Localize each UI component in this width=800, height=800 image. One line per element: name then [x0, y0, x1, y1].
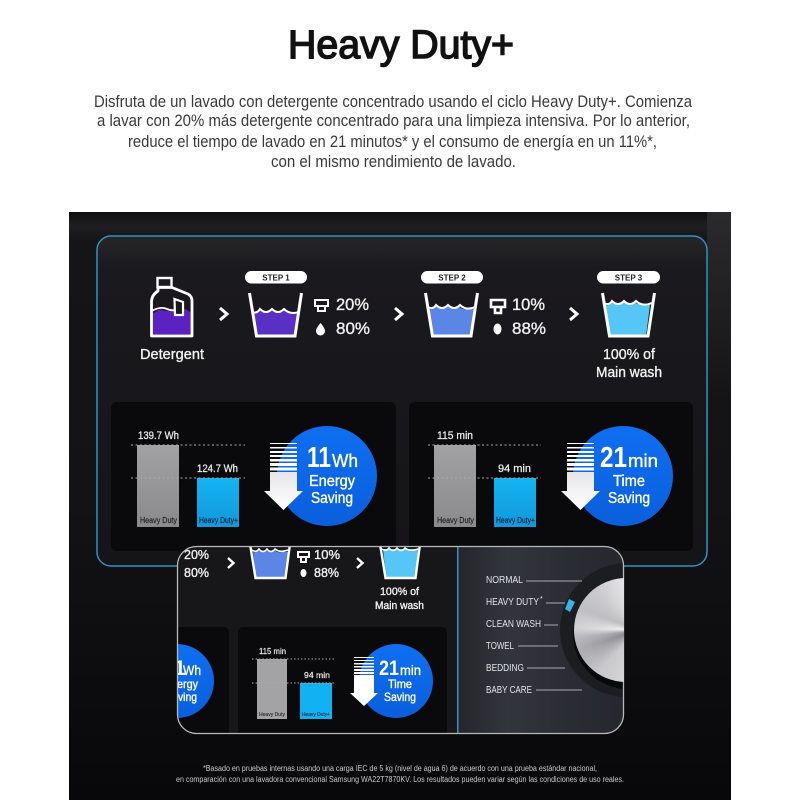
panel: energy saving: [111, 402, 396, 551]
step 2: 88%: [512, 319, 546, 338]
cycle menu labels: CLEAN WASH: [486, 619, 541, 630]
lens time card: Heavy Duty+: [302, 712, 330, 718]
panel: time saving: 21: [600, 442, 627, 474]
cycle menu labels: HEAVY DUTY: [486, 597, 539, 608]
footnote: en comparación con una lavadora convencional Samsung WA22T7870KV. Los resultados pueden variar según las condiciones de uso reales.: [176, 775, 624, 784]
lens step 1 values: 80%: [184, 565, 209, 580]
intro paragraph: reduce el tiempo de lavado en 21 minutos* y el consumo de energía en un 11%*,: [128, 133, 657, 151]
lens time card: Saving: [384, 690, 416, 704]
arrow: [570, 308, 577, 320]
footnote: *Basado en pruebas internas usando una carga IEC de 5 kg (nivel de agua 6) de acuerdo con una prueba estándar nacional,: [203, 764, 597, 773]
intro paragraph: con el mismo rendimiento de lavado.: [271, 153, 516, 171]
lens time card: 94 min: [304, 670, 330, 680]
detergent label: Detergent: [140, 346, 205, 363]
step 1: [245, 271, 370, 338]
panel: energy saving: 11: [307, 442, 331, 474]
panel: time saving: Time: [613, 473, 645, 490]
cycle menu labels: TOWEL: [486, 641, 514, 652]
lens step 2: [250, 544, 340, 580]
lens step 3: Main wash: [375, 600, 424, 612]
panel: energy saving: 139.7 Wh: [138, 430, 179, 442]
intro paragraph: a lavar con 20% más detergente concentrado para una limpieza intensiva. Por lo anterior,: [97, 112, 690, 130]
panel: energy saving: Saving: [311, 490, 353, 507]
lens step 2: 88%: [314, 565, 339, 580]
lens energy card: 1: [174, 657, 186, 680]
lens time card: 21: [379, 657, 399, 680]
cycle menu labels: BABY CARE: [486, 685, 532, 696]
lens outline: [178, 546, 624, 734]
step 3: [596, 271, 662, 381]
lens dial panel: [458, 546, 624, 734]
lens time card: min: [400, 662, 421, 678]
step 3: Main wash: [596, 364, 662, 381]
step 2: 10%: [512, 295, 545, 314]
lens arrow: [357, 558, 362, 568]
intro paragraph: Disfruta de un lavado con detergente concentrado usando el ciclo Heavy Duty+. Comienza: [94, 93, 693, 111]
step 3: STEP 3: [615, 274, 643, 282]
lens step 3: 100% of: [380, 586, 420, 598]
panel: magnified lens: [178, 547, 623, 733]
step 2: STEP 2: [438, 274, 466, 282]
panel: energy saving: Wh: [332, 451, 358, 471]
lens time card: [238, 627, 447, 737]
lens step 2: 10%: [314, 547, 340, 562]
panel: time saving: Heavy Duty+: [496, 516, 535, 525]
panel: time saving: 94 min: [498, 463, 531, 475]
cycle menu labels: [486, 575, 582, 696]
lens step 1 values: [184, 550, 209, 578]
step 1: STEP 1: [262, 274, 290, 282]
icon: silver dial knob: [574, 578, 624, 682]
intro paragraph: [94, 93, 693, 171]
lens energy card: ving: [178, 690, 197, 704]
step 1: 80%: [336, 319, 370, 338]
panel: time saving: [409, 402, 693, 551]
lens time card: 115 min: [259, 646, 286, 656]
panel: energy saving: Heavy Duty+: [199, 516, 238, 525]
panel: energy saving: Heavy Duty: [140, 516, 177, 525]
panel: energy saving: Energy: [309, 473, 355, 490]
panel: time saving: min: [628, 451, 658, 471]
panel: dark washer background: [69, 212, 731, 800]
panel: time saving: Saving: [608, 490, 650, 507]
lens energy card: Wh: [183, 662, 201, 678]
lens time card: Time: [388, 677, 412, 691]
lens divider: [457, 546, 458, 734]
panel: time saving: Heavy Duty: [437, 516, 474, 525]
lens step 1 values: 20%: [184, 547, 209, 562]
lens arrow: [228, 558, 234, 568]
panel: blue frame: [97, 236, 707, 566]
cycle menu labels: NORMAL: [486, 575, 523, 586]
panel: time saving: 115 min: [437, 430, 473, 442]
step 2: [421, 271, 546, 338]
cycle menu labels: BEDDING: [486, 663, 524, 674]
panel: energy saving: 124.7 Wh: [197, 463, 238, 475]
icon: detergent bottle: [152, 278, 192, 336]
arrow: [395, 308, 402, 320]
cycle menu labels: *: [540, 596, 543, 603]
title: Heavy Duty+: [288, 23, 514, 67]
step 1: 20%: [336, 295, 369, 314]
lens energy card: ergy: [177, 677, 198, 691]
lens time card: Heavy Duty: [259, 712, 285, 718]
lens step 3: [375, 544, 424, 612]
icon: dial indicator light: [565, 599, 575, 612]
dial ring: [560, 563, 623, 697]
step 3: 100% of: [603, 346, 656, 363]
arrow: [220, 308, 227, 320]
footnote: [176, 764, 624, 784]
lens energy card: [178, 627, 229, 733]
